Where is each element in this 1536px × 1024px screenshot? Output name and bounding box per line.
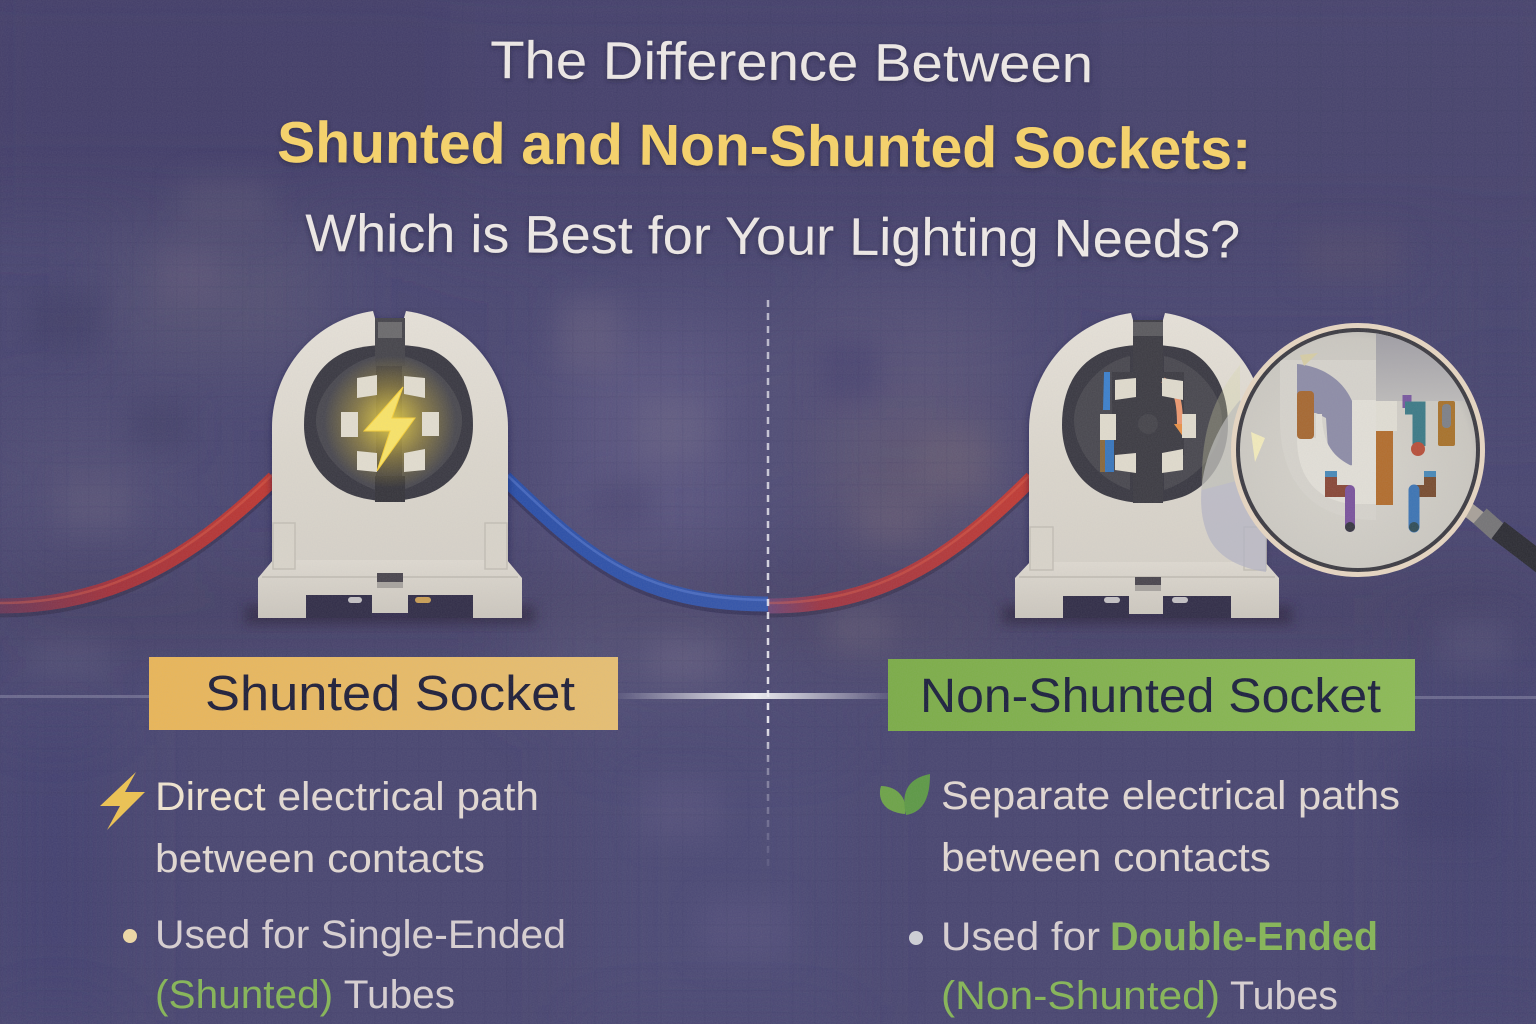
socket contacts — [1100, 378, 1196, 473]
bullet: single-ended: Used for Single-Ended — [155, 913, 566, 957]
text: direct electrical path — [155, 775, 539, 881]
icon: leaves — [880, 774, 930, 815]
title line 1: The Difference Between — [490, 31, 1093, 94]
label: shunted socket: Shunted Socket — [205, 667, 575, 721]
bullet: single-ended: (Shunted) Tubes — [155, 973, 455, 1017]
socket body — [1029, 313, 1265, 572]
dashed centre divider — [767, 300, 769, 870]
socket body — [272, 311, 508, 572]
label: non-shunted socket — [888, 659, 1415, 731]
horizontal light line — [0, 693, 1536, 699]
magnifying glass — [1230, 320, 1536, 580]
bullet: double-ended: (Non-Shunted) — [941, 974, 1220, 1018]
socket base — [258, 523, 522, 618]
lightning glow — [324, 356, 456, 488]
title line 3: Which is Best for Your Lighting Needs? — [305, 204, 1240, 270]
lens interior — [1240, 332, 1476, 568]
socket window — [1062, 320, 1228, 503]
bullet: double-ended: Double-Ended — [1110, 915, 1378, 959]
bullet: double-ended: Tubes — [1230, 974, 1338, 1018]
text: separate electrical paths — [941, 774, 1400, 880]
lightning bolt icon — [364, 387, 415, 471]
handle — [1466, 508, 1536, 566]
text: separate electrical paths: between contacts — [941, 836, 1271, 880]
lens shadow on socket — [1201, 400, 1266, 572]
non-shunted socket — [1015, 313, 1279, 618]
blue wire — [505, 473, 768, 608]
title line 2: Shunted and Non-Shunted Sockets: — [277, 110, 1251, 182]
red wire left — [0, 473, 274, 610]
floor shadows — [245, 606, 1292, 624]
text: direct electrical path: between contacts — [155, 837, 485, 881]
label: non-shunted socket: Non-Shunted Socket — [920, 670, 1381, 723]
contact bars — [1297, 391, 1455, 532]
lens haze on socket window — [1202, 365, 1240, 490]
text: direct electrical path: Direct electrical path — [155, 775, 539, 819]
socket window — [304, 318, 473, 502]
socket contacts — [341, 375, 439, 472]
bullet: double-ended: Used for — [941, 915, 1100, 959]
bullet: single-ended — [123, 913, 566, 1017]
red wire right — [768, 473, 1032, 610]
label: shunted socket — [149, 657, 618, 730]
socket base — [1015, 527, 1279, 618]
text: separate electrical paths: Separate electrical paths — [941, 774, 1400, 818]
lens glare — [1251, 432, 1265, 462]
bullet: double-ended — [909, 915, 1378, 1018]
shunted socket — [258, 311, 522, 618]
lens rim — [1234, 326, 1482, 574]
icon: lightning bolt — [100, 772, 145, 830]
title — [277, 31, 1251, 270]
